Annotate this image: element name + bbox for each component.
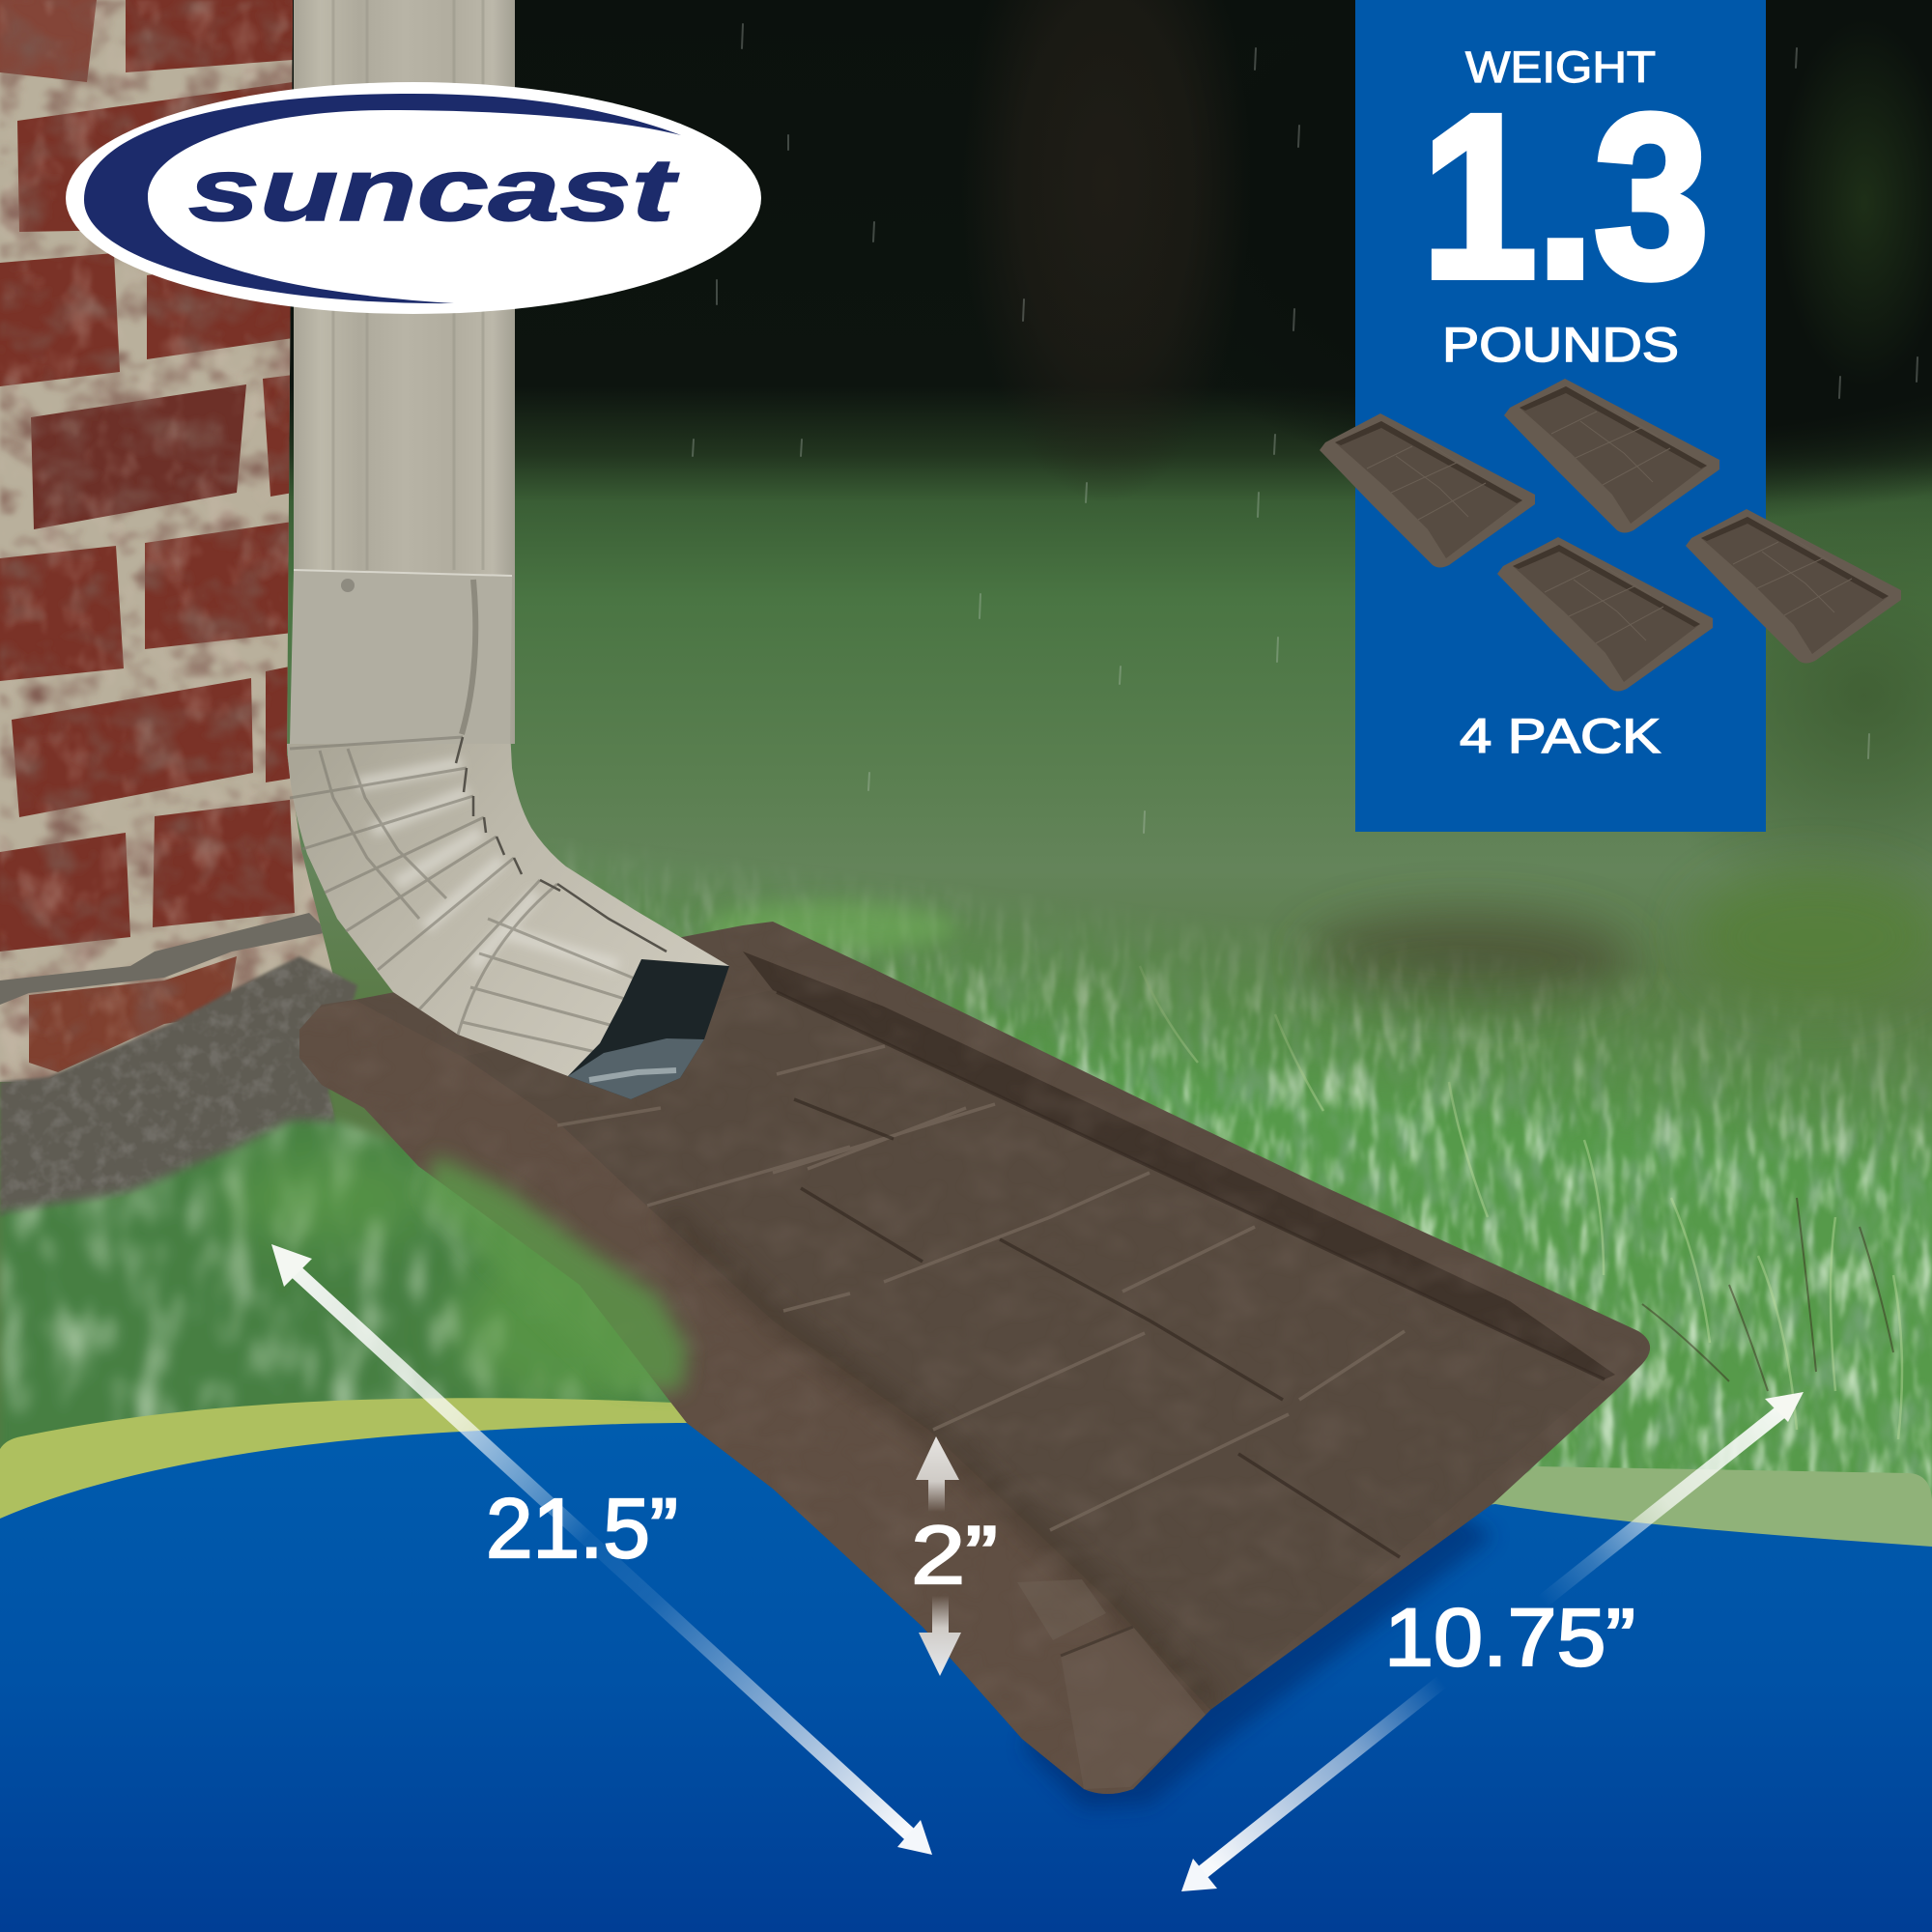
downspout strap [290,570,512,744]
blue base panel with green curved bands [0,1398,1932,1932]
value: 1.3: 1.3 [1422,67,1709,326]
tray floor [1210,1710,1211,1711]
arrow: length dimension [271,1244,932,1855]
label: weight: WEIGHT [1465,43,1656,92]
concrete footing [0,952,357,1222]
arrow: height dimension [916,1436,961,1676]
downspout straight section [294,0,515,744]
lawn: left side [0,1117,670,1446]
logo swoosh [84,94,681,303]
grass blending over tray edge [425,1154,688,1391]
paving stone lines [557,1046,1405,1530]
panel: weight and pack size [1320,0,1901,832]
brick wall [0,0,338,1092]
grass tufts behind the tray [705,902,956,952]
lawn: right side [566,858,1932,1498]
label: 10.75 inches: 10.75” [1384,1592,1635,1683]
downspout [287,0,729,1099]
downspout opening [568,959,729,1099]
elbow highlights [357,763,618,966]
large splash block tray [290,908,1671,1808]
shadow along ridge [667,1212,1212,1705]
logo wordmark: suncast [188,141,679,240]
downspout elbow crimps [290,737,635,1052]
green band right [1478,1466,1932,1555]
tray near rim [332,1091,1210,1794]
raised corner blocks [1017,1579,1106,1640]
rain streaks [693,24,1918,833]
four-pack product trays [1320,379,1901,692]
arrow: width dimension [1181,1392,1804,1891]
tray far rim channel [743,952,1615,1379]
downspout elbow [287,729,729,1076]
Suncast logo [66,82,761,314]
label: 2 inches: 2” [911,1510,998,1602]
label: pounds: POUNDS [1442,318,1679,372]
label: 21.5 inches: 21.5” [486,1482,678,1576]
label: 4 pack: 4 PACK [1460,709,1661,763]
green band left [0,1398,692,1519]
